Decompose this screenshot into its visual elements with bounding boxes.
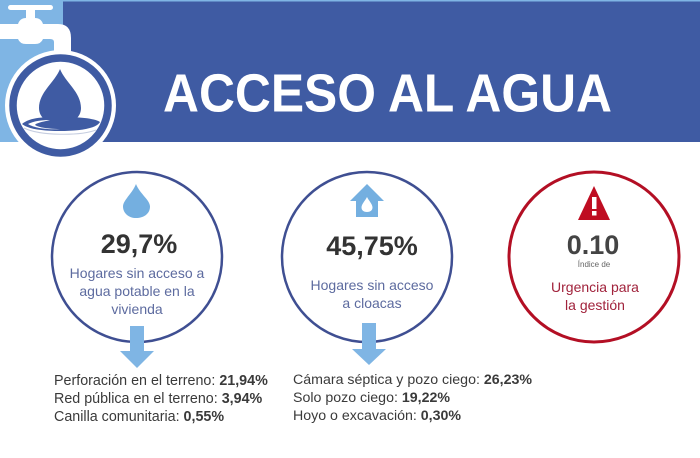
title: ACCESO AL AGUA — [163, 64, 612, 124]
circle outline — [282, 172, 452, 342]
panel: cloacas — [282, 172, 532, 424]
circle outline — [52, 172, 222, 342]
index value: 0.10 — [567, 230, 619, 260]
icon: water drop — [123, 184, 150, 218]
breakdown list: 0,55% — [184, 409, 224, 425]
description: vivienda — [111, 301, 163, 317]
breakdown list: Cámara séptica y pozo ciego: — [293, 372, 484, 388]
icon: faucet and water drop — [0, 5, 116, 161]
panel: agua potable — [52, 172, 268, 425]
breakdown list: Solo pozo ciego: — [293, 390, 402, 406]
description: la gestión — [565, 297, 625, 313]
breakdown list: 0,30% — [421, 408, 461, 424]
breakdown list: Red pública en el terreno: — [54, 391, 222, 407]
breakdown list: 19,22% — [402, 390, 450, 406]
panel: urgencia — [509, 172, 679, 342]
percentage: 45,75% — [326, 231, 418, 261]
breakdown list: Perforación en el terreno: — [54, 373, 219, 389]
breakdown list: 26,23% — [484, 372, 532, 388]
icon: warning triangle — [578, 186, 610, 220]
icon: house with drop — [350, 184, 384, 217]
arrow — [352, 323, 386, 365]
header band — [0, 0, 700, 142]
description: Hogares sin acceso a — [70, 265, 205, 281]
circle outline — [509, 172, 679, 342]
breakdown list: Canilla comunitaria: — [54, 409, 184, 425]
description: a cloacas — [342, 295, 402, 311]
breakdown list: Hoyo o excavación: — [293, 408, 421, 424]
breakdown list: 21,94% — [219, 373, 268, 389]
index caption: Índice de — [578, 260, 611, 269]
arrow — [120, 326, 154, 368]
description: Hogares sin acceso — [311, 277, 434, 293]
breakdown list: 3,94% — [222, 391, 263, 407]
description: agua potable en la — [79, 283, 195, 299]
description: Urgencia para — [551, 279, 639, 295]
percentage: 29,7% — [101, 229, 177, 259]
